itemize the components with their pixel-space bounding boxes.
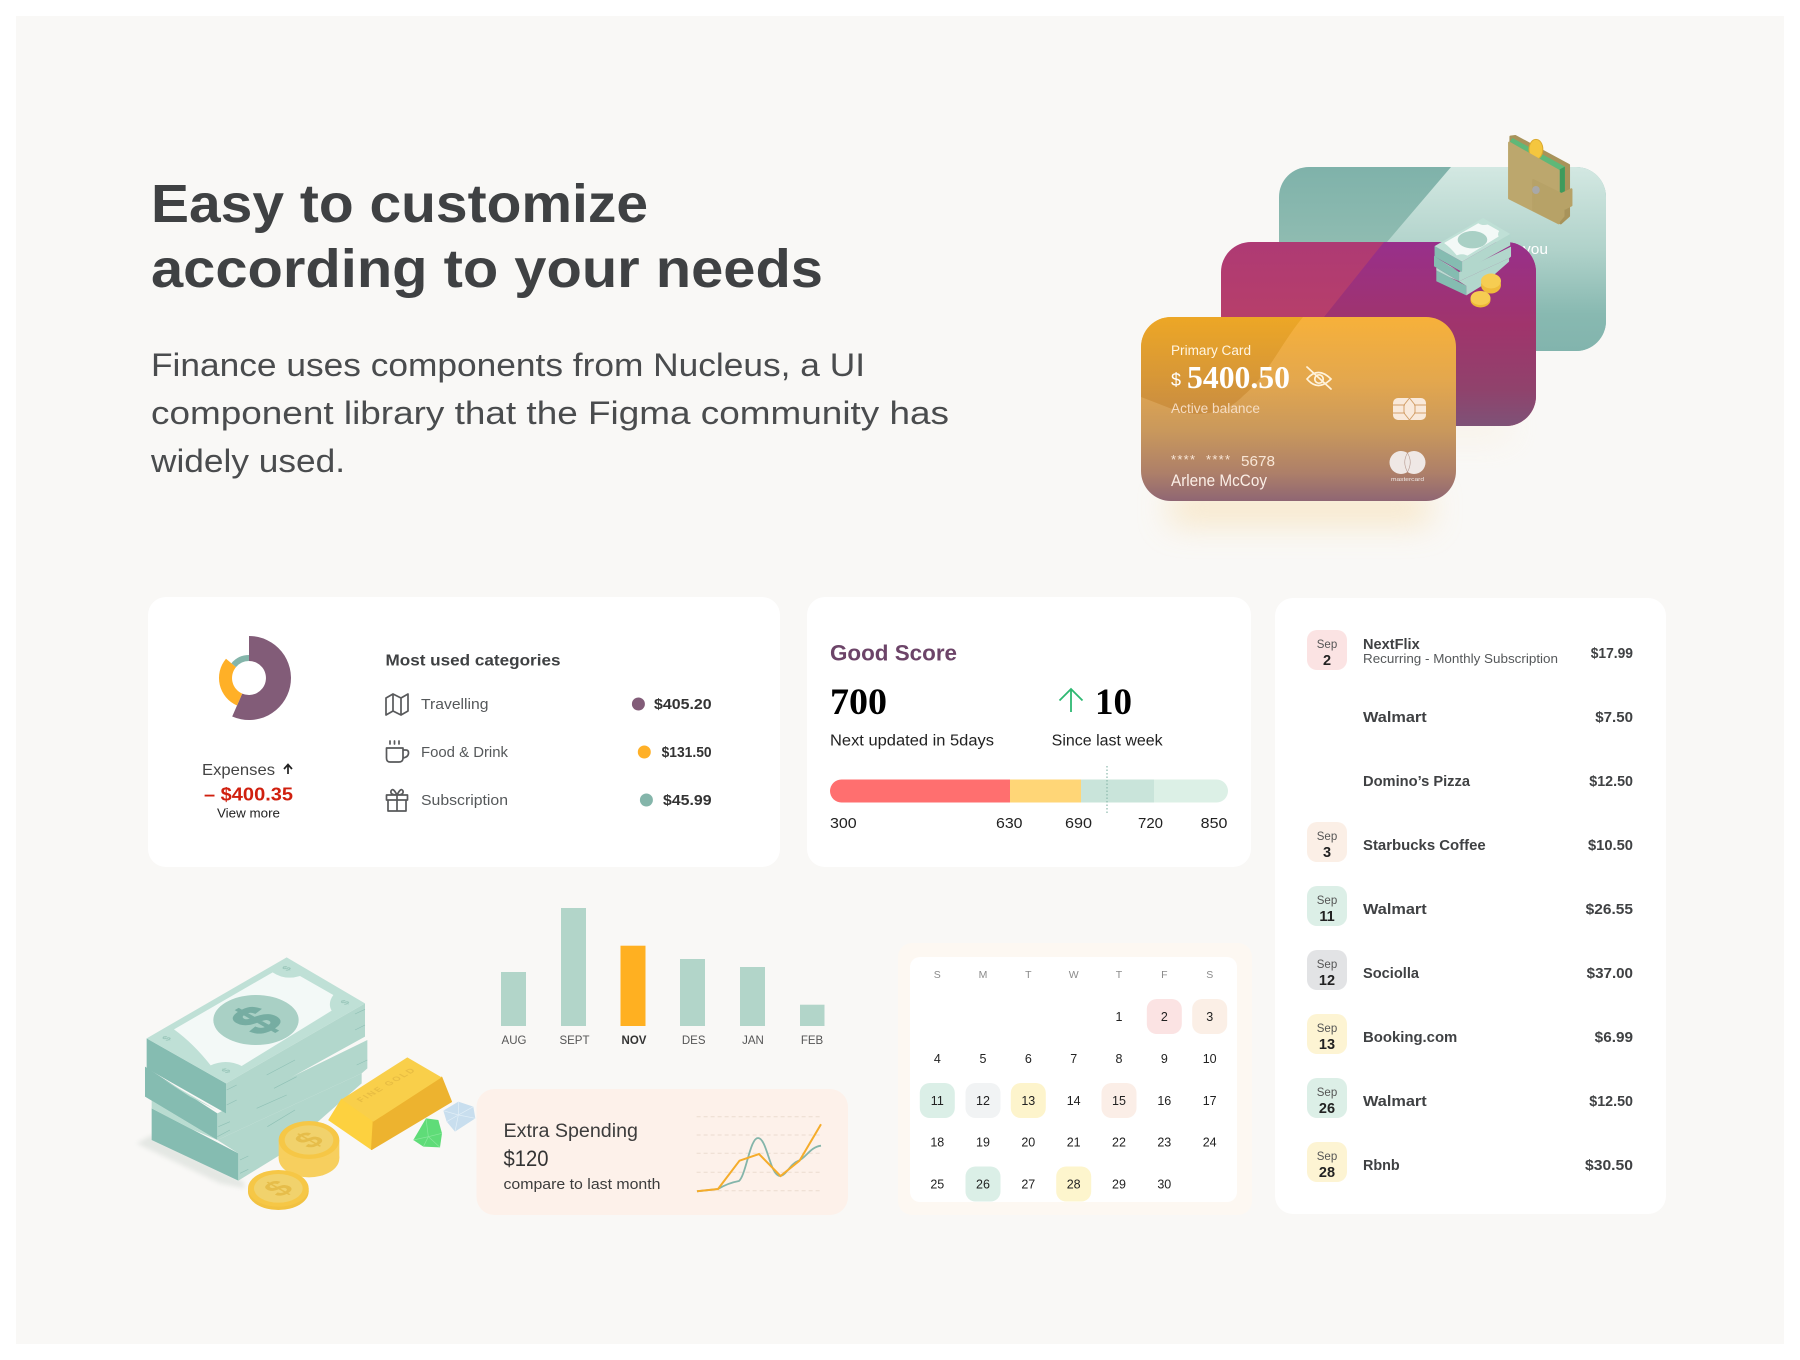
weekday header: S: [1206, 969, 1213, 981]
dates: 13: [1021, 1094, 1035, 1108]
single coin: [248, 1170, 309, 1210]
icon: gift: [386, 790, 408, 811]
active balance label: Active balance: [1171, 401, 1260, 416]
transaction: Walmart Sep 11: Sep: [1317, 895, 1337, 907]
transaction: Starbucks Coffee: [1307, 822, 1633, 862]
month labels: DES: [682, 1035, 706, 1047]
balance: 5400.50: [1187, 359, 1290, 395]
weekday header: S: [934, 969, 941, 981]
ground shadow: [137, 1135, 245, 1188]
score range bar: [830, 766, 1228, 815]
transaction: Walmart: [1363, 710, 1633, 726]
transaction: Domino's Pizza: $12.50: [1589, 774, 1633, 790]
stacked coins: [279, 1121, 339, 1177]
card: primary orange card: [1141, 317, 1456, 501]
category: food and drink: Food & Drink: [421, 744, 508, 761]
transaction: NextFlix: Sep: [1317, 639, 1337, 651]
money stack: $: [216, 997, 297, 1043]
dates: 11: [931, 1094, 944, 1108]
transaction: Rbnb: 28: [1319, 1165, 1335, 1181]
icon: card chip: [1393, 398, 1426, 420]
transaction: Rbnb: Sep: [1317, 1151, 1337, 1163]
masked card number: ****: [1171, 452, 1195, 467]
categories heading: Most used categories: [386, 653, 561, 670]
transaction: Sociolla: Sep: [1317, 959, 1337, 971]
dates: 2: [1161, 1010, 1168, 1024]
category: food and drink: $131.50: [662, 745, 712, 761]
card: magenta middle card: [1221, 242, 1536, 426]
dates: 15: [1112, 1094, 1126, 1108]
date highlights: [920, 999, 1227, 1202]
transaction: Walmart Sep 26: [1307, 1078, 1633, 1118]
money stack: $: [339, 998, 353, 1007]
transaction: NextFlix: [1307, 630, 1633, 670]
transaction: Starbucks Coffee: 3: [1323, 845, 1331, 861]
weekday header: [934, 969, 1213, 981]
title: [151, 174, 823, 299]
score scale labels: 630: [996, 815, 1022, 832]
balance: $: [1171, 370, 1181, 390]
title: Easy to customize: [151, 174, 648, 234]
weekday header: F: [1161, 969, 1168, 981]
single coin: $: [255, 1175, 302, 1201]
transaction: Rbnb: $30.50: [1585, 1158, 1633, 1174]
dates: 14: [1067, 1094, 1081, 1108]
category: subscription: Subscription: [421, 792, 508, 809]
dates: 24: [1203, 1136, 1217, 1150]
title: according to your needs: [151, 239, 823, 299]
view more link: View more: [217, 807, 280, 821]
dates: 17: [1203, 1094, 1217, 1108]
transaction: Starbucks Coffee: Sep: [1317, 831, 1337, 843]
transaction: NextFlix: 2: [1323, 653, 1331, 669]
month labels: FEB: [801, 1035, 824, 1047]
month labels: JAN: [742, 1035, 764, 1047]
transaction: Domino's Pizza: [1363, 774, 1633, 790]
dates: 12: [976, 1094, 990, 1108]
icon: wallet: [1509, 136, 1571, 223]
score scale labels: [830, 815, 1227, 832]
line chart: [697, 1117, 821, 1191]
bar chart: monthly spending: [501, 908, 824, 1047]
dates: 8: [1116, 1052, 1123, 1066]
icon: cup: [386, 741, 408, 762]
dates: 26: [976, 1178, 990, 1192]
transaction: Domino's Pizza: Domino’s Pizza: [1363, 774, 1471, 790]
transaction: NextFlix: NextFlix: [1363, 637, 1420, 653]
score scale labels: 850: [1201, 815, 1227, 832]
weekday header: T: [1025, 969, 1032, 981]
transaction: Walmart Sep 26: Sep: [1317, 1087, 1337, 1099]
dates: 3: [1206, 1010, 1213, 1024]
change note: Since last week: [1052, 733, 1163, 750]
dates: 22: [1112, 1136, 1126, 1150]
icon: hidden eye: [1307, 367, 1331, 389]
card holder: Arlene McCoy: [1171, 472, 1268, 490]
dates: 25: [930, 1178, 944, 1192]
masked card number: ****: [1206, 452, 1230, 467]
money stack: [145, 957, 367, 1181]
score scale labels: 720: [1138, 815, 1163, 832]
money stack: $: [280, 964, 295, 973]
dates: 4: [934, 1052, 941, 1066]
card: teal back card: [1279, 167, 1606, 351]
score heading: Good Score: [830, 641, 957, 666]
transaction: Walmart Sep 11: $26.55: [1586, 902, 1633, 918]
category: travelling: Travelling: [421, 696, 488, 713]
dates: 16: [1157, 1094, 1171, 1108]
panel: credit score: [807, 597, 1251, 867]
dates: 19: [976, 1136, 990, 1150]
dates: 21: [1067, 1136, 1081, 1150]
icon: green up arrow: [1060, 689, 1082, 712]
transaction: Rbnb: [1307, 1142, 1633, 1182]
intro paragraph: component library that the Figma community has: [151, 395, 949, 431]
icon: map: [386, 694, 408, 715]
score scale labels: 690: [1065, 815, 1092, 832]
dates: 6: [1025, 1052, 1032, 1066]
category: subscription: $45.99: [663, 793, 712, 809]
illustration: money, gold, coins, gems: [137, 957, 475, 1210]
transaction: Booking.com: [1307, 1014, 1633, 1054]
dates: 9: [1161, 1052, 1168, 1066]
transaction: Booking.com: $6.99: [1595, 1030, 1633, 1046]
score value: 700: [830, 682, 887, 723]
masked card number: [1171, 452, 1275, 470]
category: subscription: [421, 792, 712, 809]
dates: 28: [1067, 1178, 1081, 1192]
dates: 7: [1070, 1052, 1077, 1066]
extra spending label: Extra Spending: [504, 1121, 638, 1142]
transaction: Walmart Sep 11: [1307, 886, 1633, 926]
intro paragraph: [150, 347, 949, 479]
month labels: NOV: [622, 1035, 647, 1047]
comparison note: compare to last month: [504, 1176, 660, 1193]
transaction: Sociolla: $37.00: [1587, 966, 1633, 982]
transaction: Booking.com: 13: [1319, 1037, 1335, 1053]
panel: calendar: [898, 943, 1252, 1215]
dates: 5: [980, 1052, 987, 1066]
transaction: Walmart: Walmart: [1363, 710, 1427, 726]
money stack: $: [220, 1067, 234, 1075]
money stack: $: [160, 1034, 175, 1043]
gem: blue: [443, 1102, 475, 1132]
panel: extra spending: [476, 1089, 848, 1215]
category: travelling: [421, 696, 712, 713]
icon: small money stack: [1434, 218, 1511, 308]
transaction: Walmart Sep 11: 11: [1319, 909, 1335, 925]
transaction: Sociolla: 12: [1319, 973, 1335, 989]
transaction: Walmart Sep 26: $12.50: [1589, 1094, 1633, 1110]
panel: expenses categories: [148, 597, 780, 867]
card shadow: magenta: [1320, 415, 1510, 439]
transaction: Starbucks Coffee: $10.50: [1588, 838, 1633, 854]
intro paragraph: widely used.: [150, 443, 345, 479]
transaction: Starbucks Coffee: Starbucks Coffee: [1363, 838, 1486, 854]
transaction: NextFlix: Recurring - Monthly Subscription: [1363, 652, 1558, 666]
weekday header: T: [1116, 969, 1123, 981]
weekday header: W: [1069, 969, 1079, 981]
transaction: Sociolla: [1307, 950, 1633, 990]
icon: up arrow: [284, 764, 292, 774]
month labels: AUG: [502, 1035, 527, 1047]
stacked coins: $: [285, 1126, 332, 1153]
score change: 10: [1095, 682, 1132, 723]
card stack illustration: [1141, 136, 1606, 524]
expenses label: Expenses: [202, 762, 275, 779]
dates: 27: [1021, 1178, 1035, 1192]
card label: Primary Card: [1171, 343, 1251, 358]
intro paragraph: Finance uses components from Nucleus, a UI: [151, 347, 865, 383]
extra spending amount: $120: [504, 1146, 548, 1171]
transaction: Walmart: $7.50: [1595, 710, 1633, 726]
dates: 29: [1112, 1178, 1126, 1192]
gold bar: FINE GOLD: [354, 1067, 418, 1104]
dates: 1: [1116, 1010, 1123, 1024]
category: travelling: $405.20: [654, 697, 712, 713]
card: teal back card: you: [1523, 241, 1548, 258]
dates: [930, 1010, 1217, 1192]
weekday header: M: [979, 969, 987, 981]
score note: Next updated in 5days: [830, 733, 994, 750]
transaction: Sociolla: Sociolla: [1363, 966, 1420, 982]
dates: 18: [930, 1136, 944, 1150]
transaction: Walmart Sep 11: Walmart: [1363, 902, 1427, 918]
donut chart: [219, 636, 291, 720]
panel: transactions list: [1275, 598, 1666, 1214]
icon: mastercard: [1390, 451, 1426, 483]
dates: 30: [1157, 1178, 1171, 1192]
transaction: Booking.com: Sep: [1317, 1023, 1337, 1035]
dates: 20: [1021, 1136, 1035, 1150]
dates: 23: [1157, 1136, 1171, 1150]
transaction: Rbnb: Rbnb: [1363, 1158, 1400, 1174]
gold bar: [329, 1057, 451, 1149]
dates: 10: [1203, 1052, 1217, 1066]
score scale labels: 300: [830, 815, 857, 832]
icon: mastercard: mastercard: [1391, 477, 1424, 483]
transaction: Booking.com: Booking.com: [1363, 1030, 1457, 1046]
transaction: Walmart Sep 26: 26: [1319, 1101, 1335, 1117]
category: food and drink: [421, 744, 712, 761]
card shadow: orange: [1170, 492, 1430, 524]
transaction: Walmart Sep 26: Walmart: [1363, 1094, 1427, 1110]
month labels: SEPT: [559, 1035, 590, 1047]
gem: green: [413, 1118, 442, 1147]
transaction: NextFlix: $17.99: [1591, 646, 1633, 662]
masked card number: 5678: [1241, 453, 1275, 470]
month labels: [502, 1035, 824, 1047]
expenses amount: – $400.35: [204, 785, 293, 805]
